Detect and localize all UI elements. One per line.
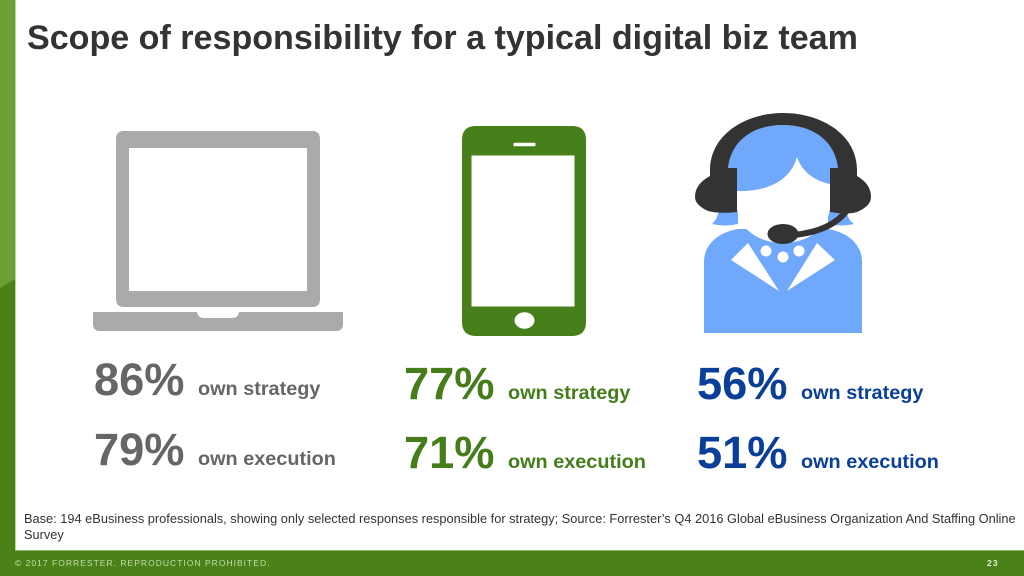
stat: laptop execution: 79%	[94, 424, 184, 475]
icon: laptop	[93, 131, 343, 331]
copyright: © 2017 FORRESTER. REPRODUCTION PROHIBITED.	[15, 558, 270, 568]
stat: phone execution: 71%	[404, 427, 494, 478]
page number: 23	[987, 558, 999, 568]
stat: phone execution	[404, 427, 646, 478]
stat: laptop execution: own execution	[198, 448, 336, 470]
stat: laptop execution	[94, 424, 336, 475]
stat: laptop strategy	[94, 354, 320, 405]
stat: phone strategy: 77%	[404, 358, 494, 409]
stat: agent execution: own execution	[801, 451, 939, 473]
stat: agent execution	[697, 427, 939, 478]
stat: phone strategy	[404, 358, 630, 409]
stat: agent strategy: own strategy	[801, 382, 923, 404]
icon: headset agent	[695, 113, 871, 333]
source note: Base: 194 eBusiness professionals, showing only selected responses responsible for strategy; Source: Forrester’s Q4 2016 Global eBusiness Organization And Staffing Online Survey	[24, 511, 1016, 542]
footer bar	[0, 550, 1024, 576]
left sidebar	[0, 0, 16, 550]
stat: agent strategy	[697, 358, 924, 409]
stat: phone strategy: own strategy	[508, 382, 630, 404]
stat: agent execution: 51%	[697, 427, 787, 478]
icon: smartphone	[462, 126, 586, 336]
stat: laptop strategy: 86%	[94, 354, 184, 405]
stat: phone execution: own execution	[508, 451, 646, 473]
stat: agent strategy: 56%	[697, 358, 787, 409]
title: Scope of responsibility for a typical digital biz team	[27, 19, 858, 57]
stat: laptop strategy: own strategy	[198, 378, 320, 400]
